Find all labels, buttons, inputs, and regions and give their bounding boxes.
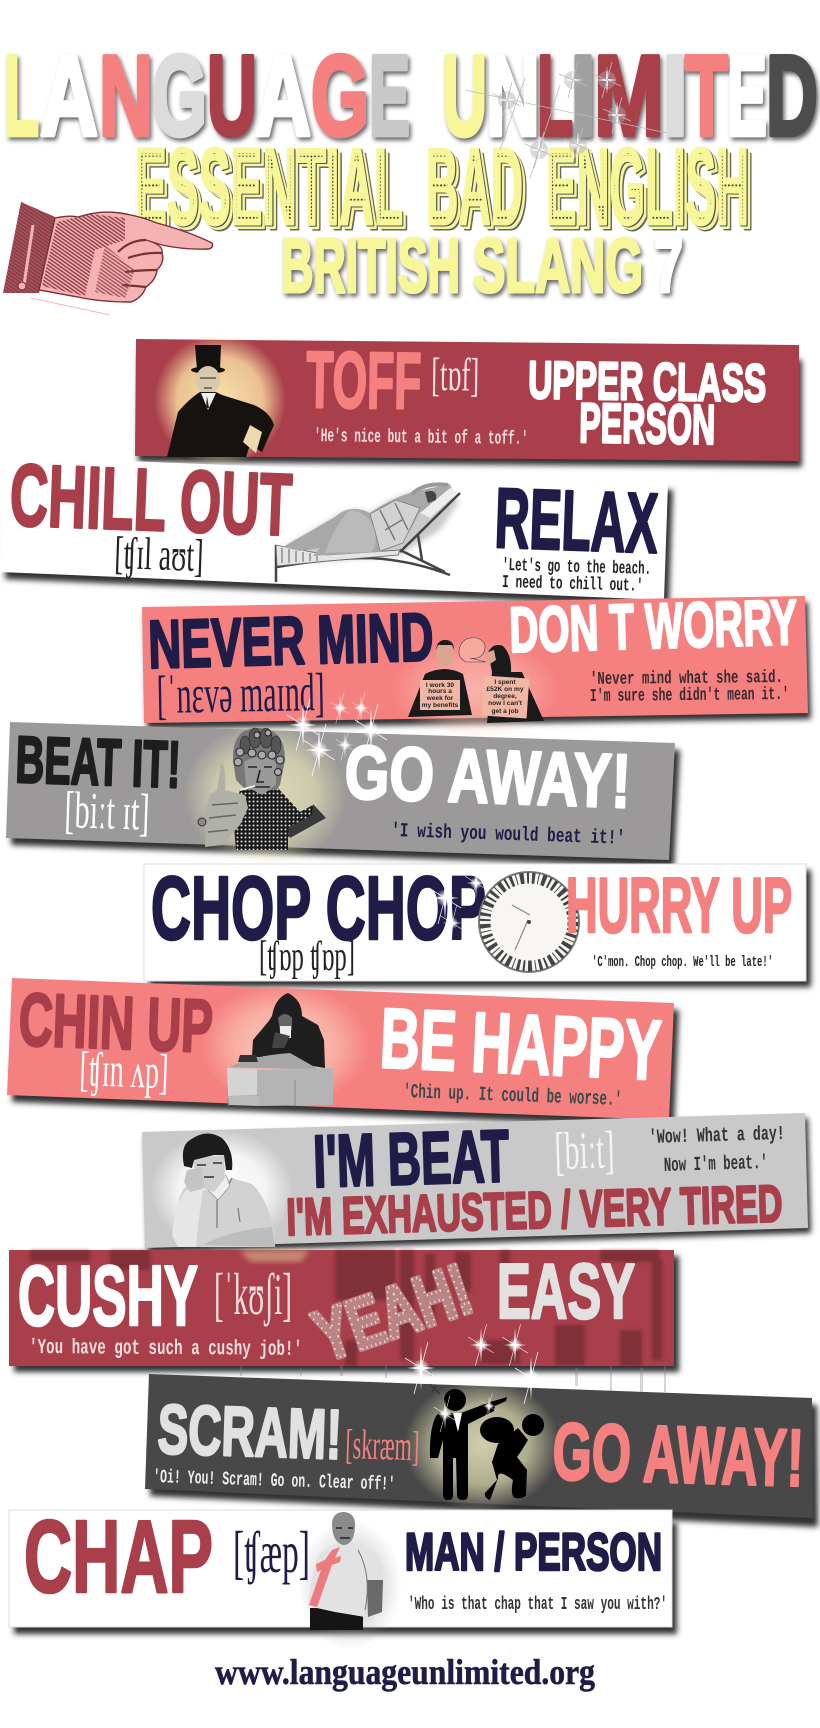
icon: tired young man — [172, 1133, 275, 1247]
icon: man and woman with signs: I work 30 — [426, 682, 454, 689]
meaning: man / person: MAN / PERSON — [405, 1523, 662, 1582]
word: i'm beat: I'M BEAT — [312, 1114, 510, 1203]
title: Language Unlimited: N — [99, 33, 153, 160]
word: chin up: CHIN UP — [17, 977, 214, 1068]
icon: yeah sign — [304, 1249, 481, 1377]
panel: cushy — [9, 1247, 679, 1398]
decoration: panel sparkles — [287, 692, 547, 1432]
icon: man and woman with signs: I spent — [494, 679, 516, 686]
phonetics: chin up: [ʧɪn ʌp] — [79, 1041, 170, 1099]
panel: toff — [135, 334, 802, 467]
panel: chill out — [0, 445, 673, 607]
panel: chop chop — [144, 859, 811, 987]
title: Language Unlimited: U — [207, 33, 257, 160]
example sentence: 'You have got such a cushy job!' — [29, 1337, 302, 1362]
phonetics: toff: [tɒf] — [431, 349, 480, 402]
icon: yeah sign: YEAH! — [304, 1249, 481, 1377]
title: Language Unlimited: N — [486, 33, 540, 160]
meaning: upper class person: PERSON — [579, 391, 716, 456]
website url: www.languageunlimited.org — [215, 1652, 595, 1692]
icon: woman on sun lounger — [276, 484, 460, 582]
title: Language Unlimited: E — [727, 33, 767, 160]
icon: yeah sign: YEAH! — [304, 1249, 481, 1377]
word: beat it: BEAT IT! — [15, 722, 182, 801]
decoration: title sparkles — [465, 62, 667, 178]
example sentence: 'Oi! You! Scram! Go on. Clear off!' — [153, 1466, 395, 1496]
meaning: upper class person — [528, 351, 767, 456]
meaning: relax: RELAX — [493, 471, 660, 572]
subtitle: British Slang 7: BRITISH — [281, 223, 460, 309]
subtitle: Essential Bad English — [138, 146, 752, 232]
meaning: go away: GO AWAY! — [343, 730, 632, 824]
example sentence — [649, 1123, 785, 1178]
phonetics: chop chop: [ʧɒp ʧɒp] — [259, 934, 355, 980]
title: Language Unlimited: A — [40, 33, 98, 160]
title: Language Unlimited: I — [662, 33, 688, 160]
phonetics: never mind: [ˈnɛvə maɪnd] — [156, 662, 325, 725]
icon: man in top hat — [167, 345, 274, 457]
icon: man and woman with signs: my benefits — [422, 702, 459, 709]
icon: large man in England shirt — [308, 1512, 383, 1630]
example sentence: 'He's nice but a bit of a toff.' — [314, 425, 528, 450]
subtitle: Essential Bad English: ESSENTIAL — [136, 127, 404, 249]
example sentence: I need to chill out.' — [502, 573, 643, 597]
word: cushy: CUSHY — [18, 1249, 198, 1344]
word: chill out: CHILL OUT — [8, 445, 294, 554]
phonetics: beat it: [biːt ɪt] — [64, 782, 150, 842]
example sentence: 'Who is that chap that I saw you with?' — [408, 1595, 667, 1615]
meaning: be happy: BE HAPPY — [378, 991, 663, 1099]
word: chop chop: CHOP CHOP — [151, 859, 486, 959]
icon: man and woman with signs: £52K on my — [486, 686, 524, 693]
title: Language Unlimited: A — [255, 33, 311, 160]
example sentence — [590, 668, 789, 707]
word: never mind: NEVER MIND — [147, 599, 434, 683]
title: Language Unlimited: T — [685, 33, 728, 160]
meaning: easy: EASY — [497, 1247, 635, 1335]
example sentence — [502, 556, 651, 597]
subtitle: Essential Bad English: BAD — [430, 130, 527, 252]
icon: homeless man in box — [227, 993, 333, 1106]
example sentence: 'I wish you would beat it!' — [391, 820, 625, 851]
phonetics: chap: [ʧæp] — [233, 1519, 310, 1585]
phonetics: beat: [biːt] — [554, 1121, 615, 1181]
panel: chap — [9, 1499, 677, 1650]
title: Language Unlimited: M — [594, 33, 664, 160]
panel: i'm beat — [142, 1113, 811, 1253]
title: Language Unlimited: G — [311, 33, 369, 160]
subtitle: Essential Bad English: BAD — [431, 131, 528, 253]
panel: cushy: [ˈkʊʃi] — [214, 1261, 292, 1327]
subtitle: Essential Bad English: BAD — [426, 126, 523, 248]
icon: man and woman with signs: week for — [426, 695, 454, 702]
panel: scram — [145, 1374, 818, 1527]
panel: never mind — [142, 586, 811, 740]
title: Language Unlimited: I — [570, 33, 596, 160]
title: Language Unlimited: G — [152, 33, 207, 160]
title: Language Unlimited: E — [369, 33, 410, 160]
title: Language Unlimited — [4, 33, 818, 160]
subtitle: Essential Bad English: BAD — [427, 127, 524, 249]
word: scram: SCRAM! — [157, 1390, 343, 1474]
phonetics: scram: [skræm] — [345, 1422, 420, 1470]
example sentence: 'Let's go to the beach. — [502, 556, 651, 580]
phonetics: chill out: [ʧɪl aʊt] — [114, 527, 204, 581]
icon: man and woman with signs — [408, 638, 544, 723]
subtitle: British Slang 7: 7 — [654, 223, 683, 309]
title: Language Unlimited: U — [442, 33, 487, 160]
icon: man and woman with signs: hours a — [428, 688, 452, 695]
title: Language Unlimited: L — [4, 33, 39, 160]
panel: beat it — [6, 722, 680, 867]
icon: clock — [479, 872, 579, 972]
title: Language Unlimited: L — [537, 33, 573, 160]
icon: man and woman with signs: degree, — [493, 693, 517, 700]
icon: woman in curlers — [198, 728, 326, 850]
icon: pointing hand — [3, 202, 213, 315]
word: chap: CHAP — [24, 1499, 213, 1614]
example sentence: 'Chin up. It could be worse.' — [403, 1081, 622, 1112]
icon: man ordering another away — [430, 1384, 544, 1500]
icon: man and woman with signs: now I can't — [488, 700, 523, 707]
subtitle: Essential Bad English: ESSENTIAL — [139, 130, 407, 252]
subtitle: Essential Bad English: ESSENTIAL — [135, 126, 403, 248]
subtitle: Essential Bad English: ESSENTIAL — [140, 131, 408, 253]
word: TOFF: TOFF — [306, 335, 422, 426]
subtitle: British Slang 7: SLANG — [473, 223, 643, 309]
panel: chin up — [7, 977, 679, 1127]
icon: man and woman with signs: get a job — [491, 708, 519, 715]
